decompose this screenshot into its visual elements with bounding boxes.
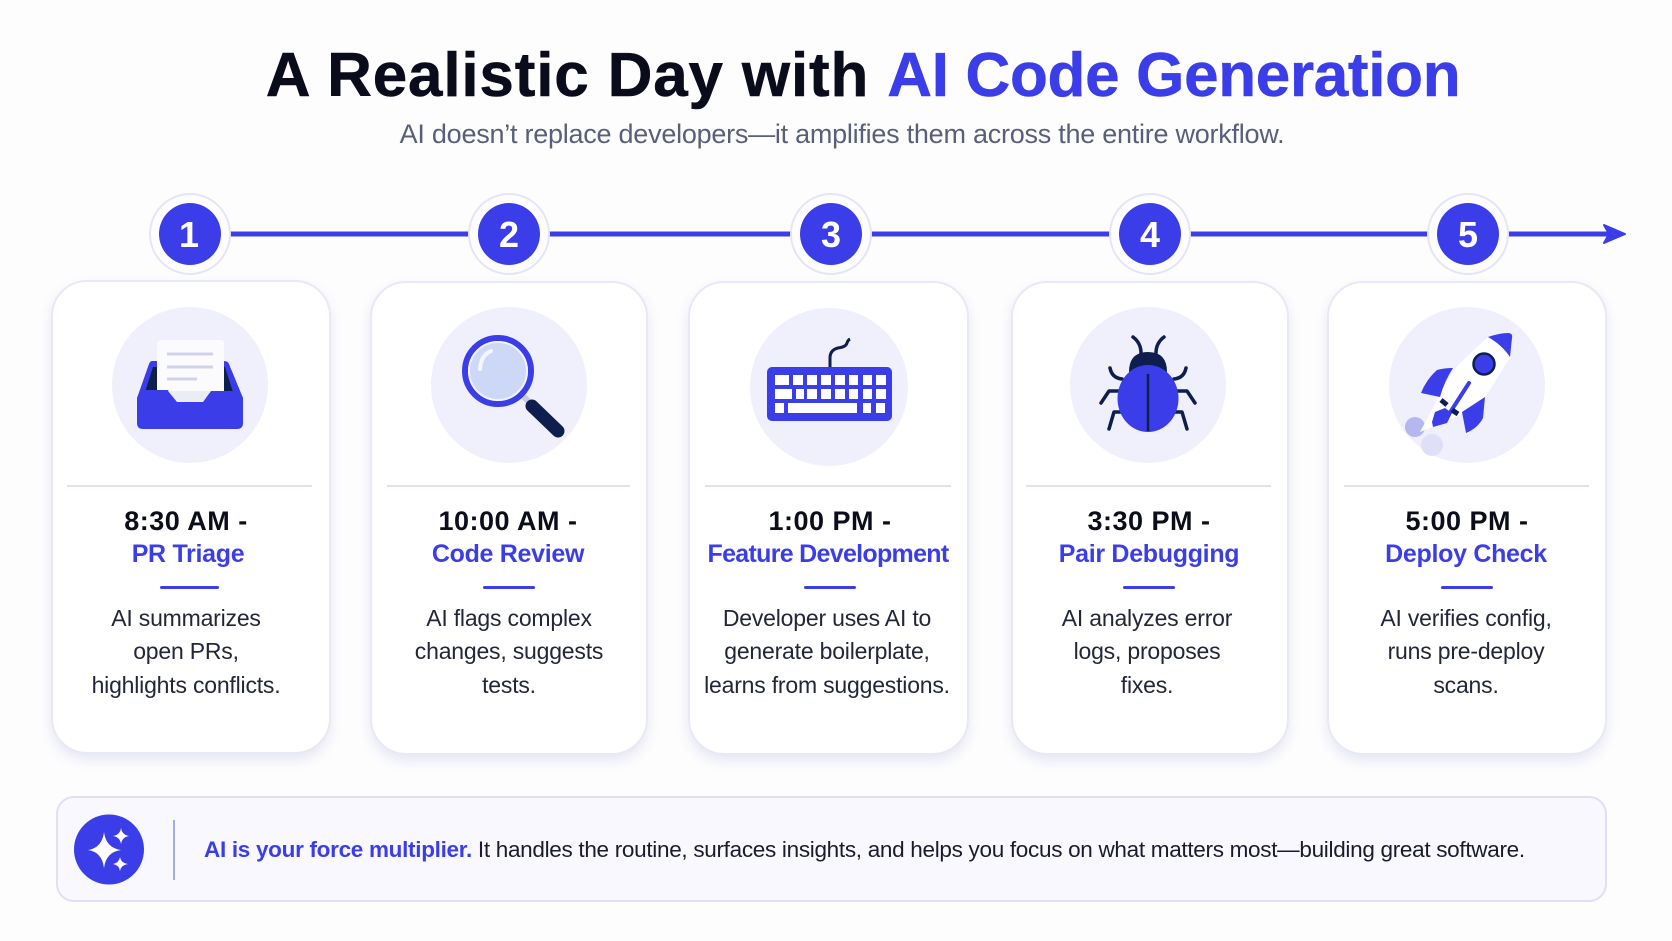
description: generate boilerplate, <box>724 638 930 664</box>
panel: card 1 PR Triage <box>49 280 333 762</box>
description: learns from suggestions. <box>704 672 950 698</box>
callout text: AI is your force multiplier. It handles the routine, surfaces insights, and helps you focus on what matters most—building great software. <box>204 837 1525 862</box>
description <box>1380 605 1552 698</box>
panel: card 2 Code Review <box>368 281 650 763</box>
description: changes, suggests <box>415 638 603 664</box>
callout: force multiplier <box>56 796 1607 902</box>
panel: card 5 Deploy Check: Deploy Check <box>1385 540 1547 568</box>
time and task: 5:00 PM - <box>1405 506 1529 536</box>
step 2: 2 <box>499 214 519 255</box>
description: runs pre-deploy <box>1388 638 1544 664</box>
icon: magnifying glass <box>431 307 587 463</box>
panel: card 4 Pair Debugging <box>1009 281 1291 763</box>
description <box>92 605 280 698</box>
step 5 <box>1428 194 1508 274</box>
description: logs, proposes <box>1074 638 1220 664</box>
subtitle: AI doesn’t replace developers—it amplifies them across the entire workflow. <box>400 119 1284 149</box>
description: AI analyzes error <box>1062 605 1232 631</box>
title: A Realistic Day with AI Code Generation <box>266 41 1460 110</box>
description: AI summarizes <box>111 605 261 631</box>
time and task: 3:30 PM - <box>1087 506 1211 536</box>
step 4 <box>1110 194 1190 274</box>
time and task: 1:00 PM - <box>768 506 892 536</box>
description: Developer uses AI to <box>723 605 931 631</box>
arrow head <box>1604 225 1625 243</box>
description: scans. <box>1433 672 1499 698</box>
step 2 <box>469 194 549 274</box>
time and task: 10:00 AM - <box>438 506 578 536</box>
panel: card 3 Feature Development <box>686 281 971 763</box>
panel: card 4 Pair Debugging: Pair Debugging <box>1059 540 1239 568</box>
time and task: 8:30 AM - <box>124 506 248 536</box>
panel: card 2 Code Review: Code Review <box>432 540 584 568</box>
icon: keyboard <box>750 308 908 466</box>
step 5: 5 <box>1458 214 1478 255</box>
icon: inbox tray <box>112 307 268 463</box>
description: AI flags complex <box>426 605 592 631</box>
icon: bug <box>1070 307 1226 463</box>
description <box>1062 605 1232 698</box>
step 4: 4 <box>1140 214 1160 255</box>
step 1: 1 <box>179 214 199 255</box>
description: highlights conflicts. <box>92 672 280 698</box>
description: open PRs, <box>133 638 239 664</box>
icon: rocket <box>1389 307 1545 463</box>
step 1 <box>150 194 230 274</box>
description: AI verifies config, <box>1380 605 1552 631</box>
divider <box>173 820 175 880</box>
description: fixes. <box>1121 672 1173 698</box>
panel: card 3 Feature Development: Feature Development <box>708 540 948 568</box>
panel: card 1 PR Triage: PR Triage <box>132 540 244 568</box>
description <box>704 605 950 698</box>
timeline line <box>229 232 1612 236</box>
description: tests. <box>482 672 536 698</box>
step 3 <box>791 194 871 274</box>
description <box>415 605 603 698</box>
timeline with numbered steps and arrow <box>149 193 1626 275</box>
step 3: 3 <box>821 214 841 255</box>
panel: card 5 Deploy Check <box>1325 281 1609 763</box>
icon: sparkles <box>74 814 144 884</box>
